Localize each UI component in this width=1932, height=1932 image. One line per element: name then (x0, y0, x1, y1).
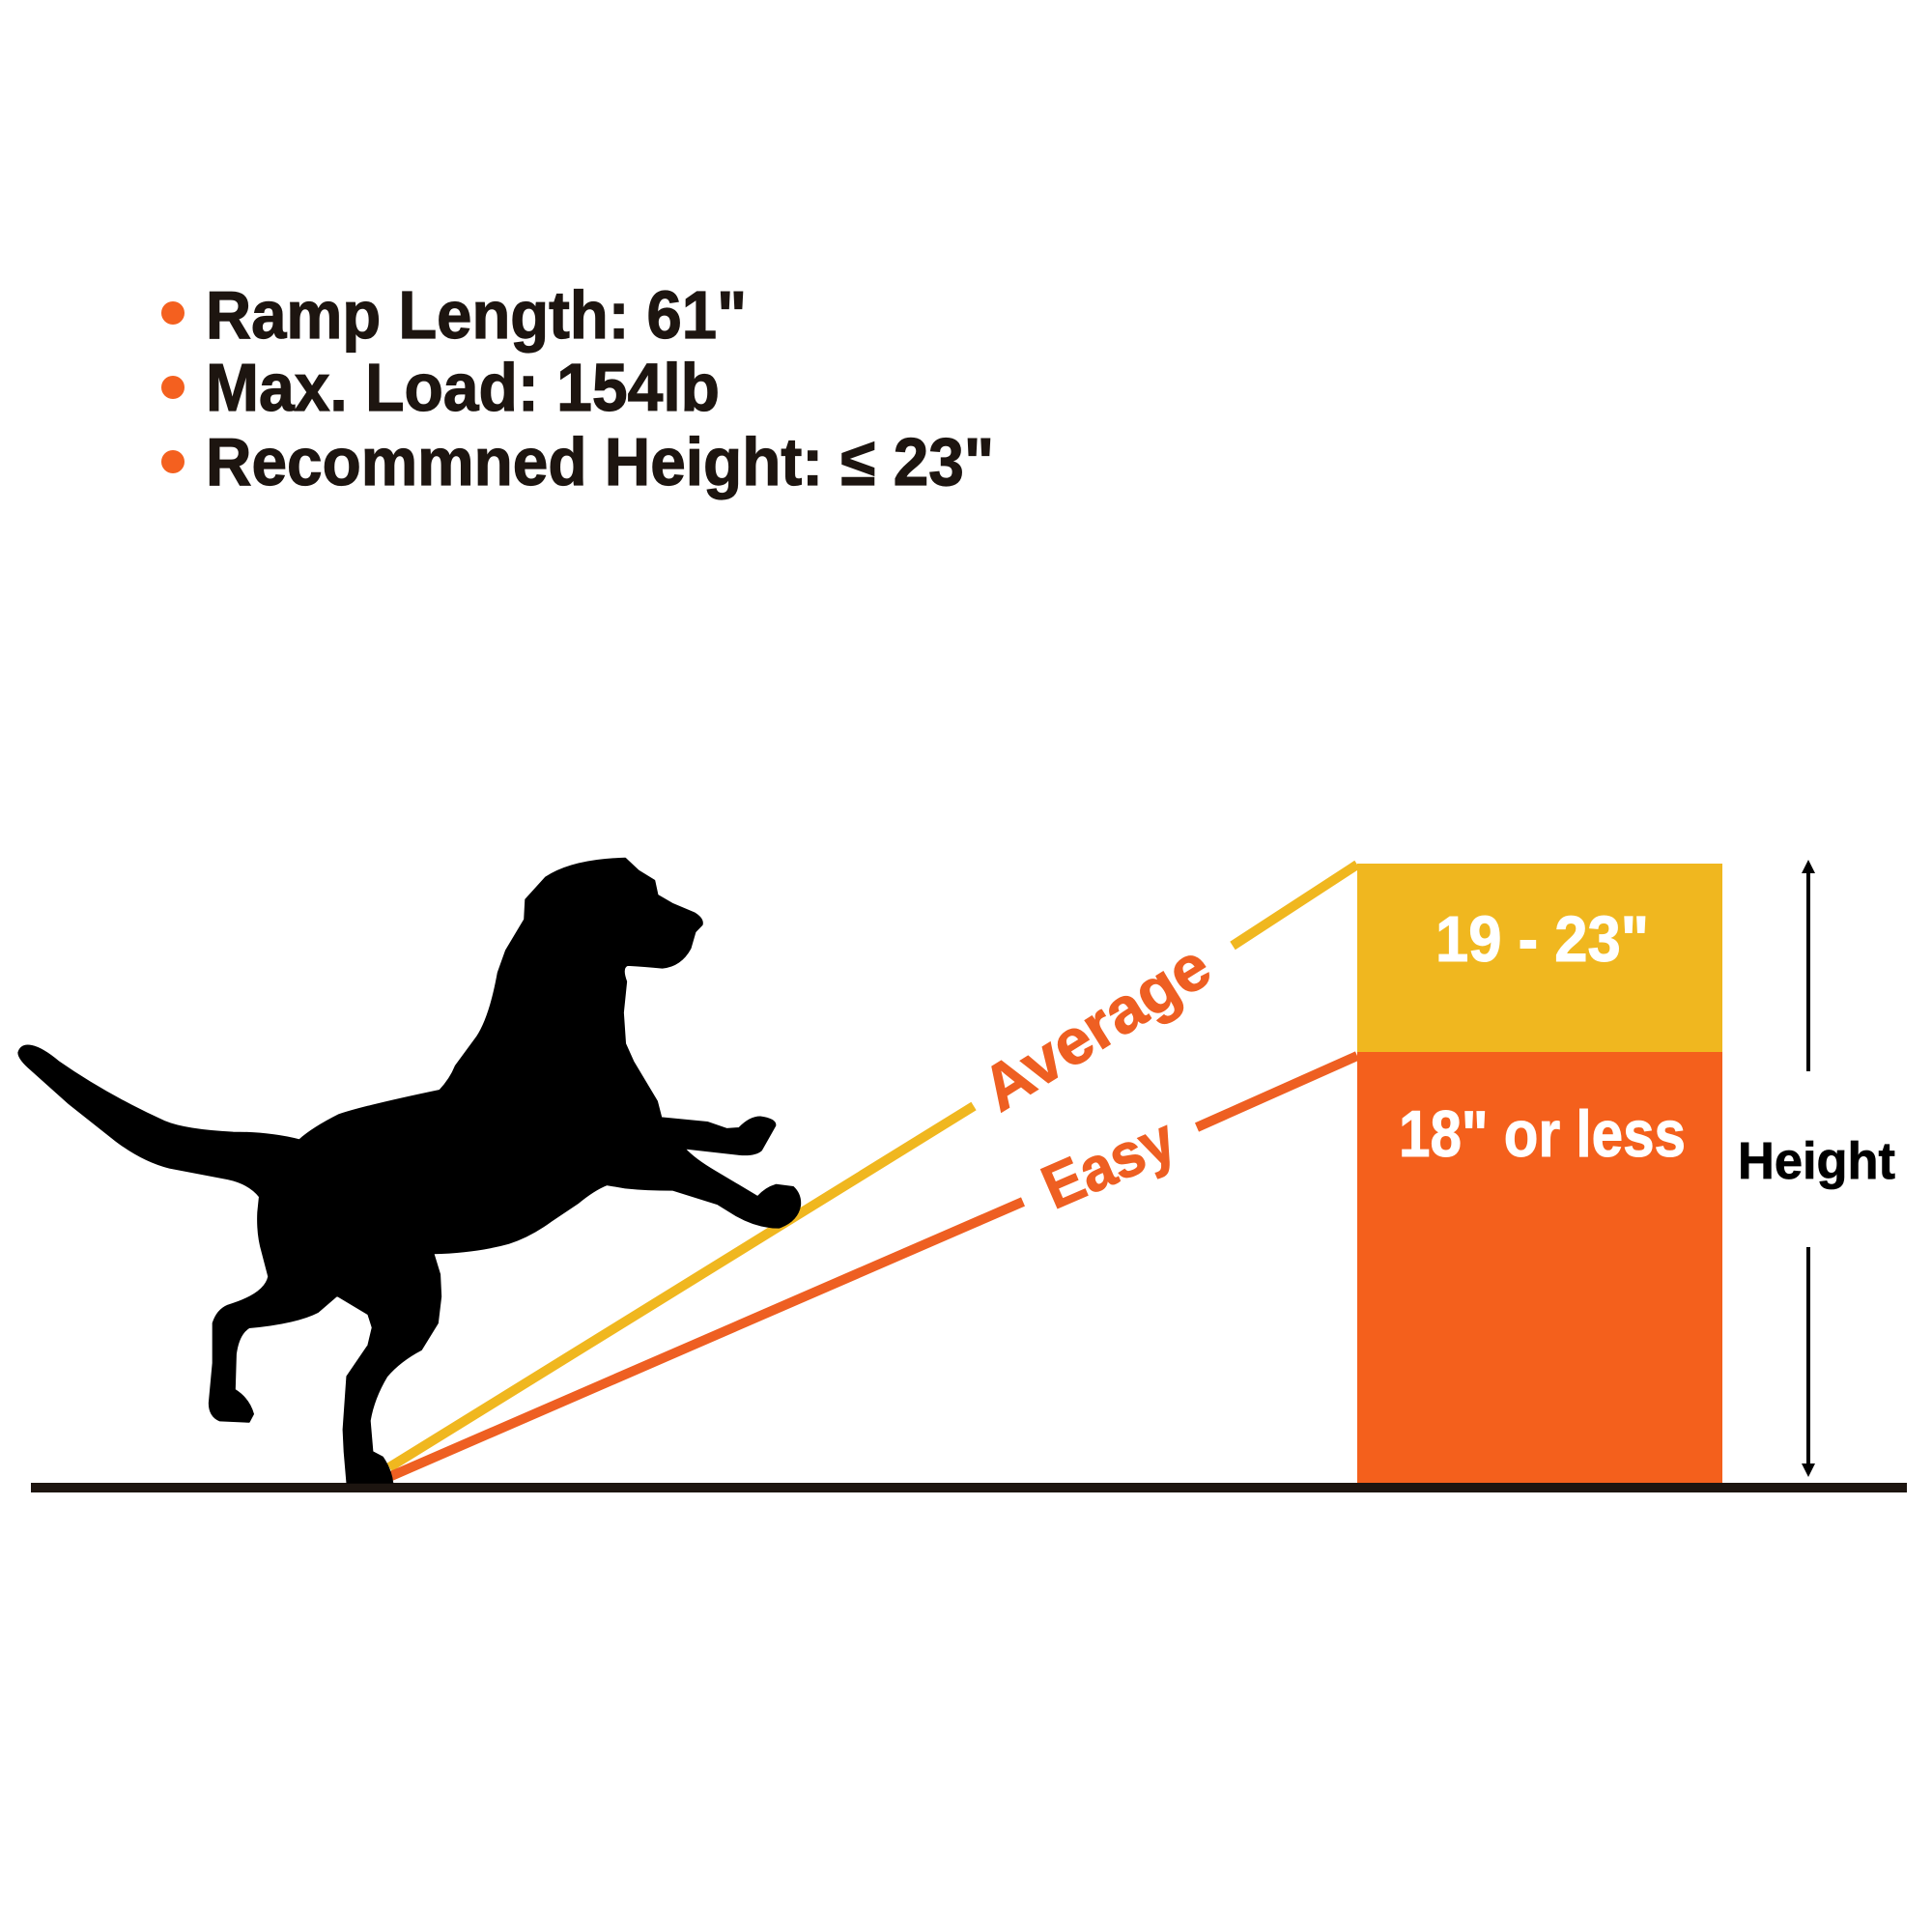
label: average: Average (969, 929, 1223, 1124)
average ramp line (389, 865, 1357, 1467)
spec: ramp length: Ramp Length: 61" (206, 277, 747, 353)
specification list (161, 277, 994, 499)
spec: recommended height: Recommned Height: ≤ 23" (206, 424, 994, 499)
label: height: Height (1738, 1132, 1895, 1190)
height block: average 19-23 in (1357, 864, 1722, 1052)
height block: easy 18 in or less (1357, 1052, 1722, 1484)
bullet: max load (161, 376, 185, 399)
dog silhouette (18, 858, 800, 1483)
arrow: height up (1802, 860, 1815, 1071)
bullet: ramp length (161, 301, 185, 325)
easy ramp line (391, 1056, 1357, 1476)
spec: max load: Max. Load: 154lb (206, 350, 720, 425)
ground line (31, 1483, 1907, 1492)
label: easy: Easy (1032, 1104, 1185, 1222)
height block: easy 18 in or less: 18" or less (1399, 1097, 1686, 1171)
arrow: height down (1802, 1247, 1815, 1477)
height block: average 19-23 in: 19 - 23" (1435, 903, 1649, 976)
bullet: recommended height (161, 450, 185, 473)
